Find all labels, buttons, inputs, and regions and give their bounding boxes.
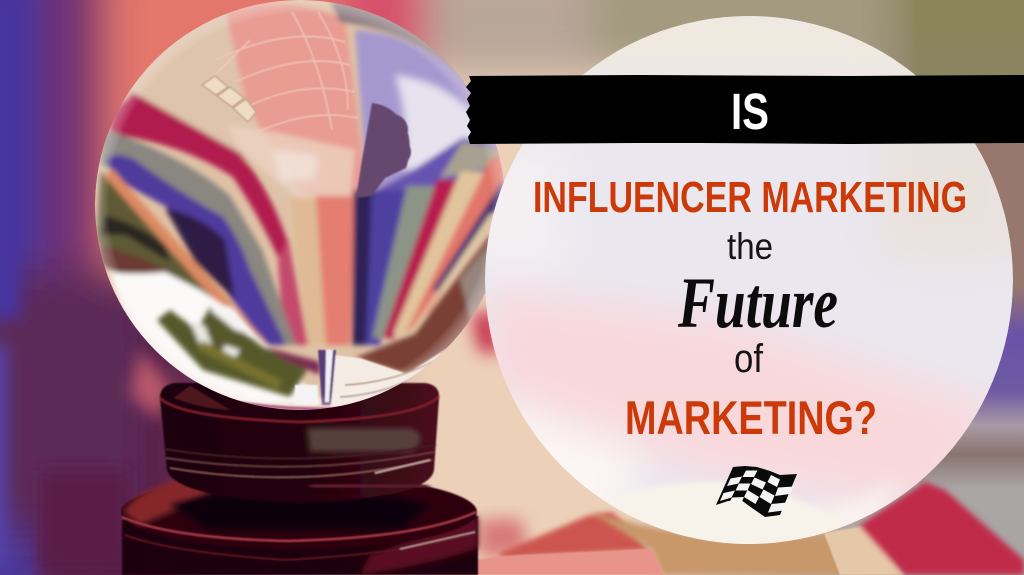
reflected tree xyxy=(356,103,411,198)
icon: checkered flag xyxy=(716,466,797,517)
banner word: IS xyxy=(731,83,769,140)
knit fabric: tan stripe xyxy=(590,512,905,575)
crimson stripe xyxy=(383,180,461,338)
knit fabric: crimson fold xyxy=(860,482,1024,575)
salmon stripe xyxy=(316,196,356,345)
reflected tree below xyxy=(157,307,320,397)
bottom right glass xyxy=(294,346,448,408)
dark plum xyxy=(165,208,235,300)
white blown-out highlight xyxy=(110,272,325,405)
crystal ball stand xyxy=(121,383,478,575)
crimson band xyxy=(108,92,288,268)
velvet ring xyxy=(235,399,338,410)
headline text: the xyxy=(727,226,773,267)
lower disc xyxy=(121,475,478,575)
purple sky below tree line xyxy=(378,136,492,194)
upper cylinder xyxy=(160,383,439,503)
knit fabric: red stripe xyxy=(500,512,650,558)
knit fabric seen through panel xyxy=(611,482,850,544)
cream stripe xyxy=(290,198,328,345)
salmon stripe right xyxy=(405,152,505,334)
brown wedge xyxy=(354,234,489,374)
cream stripe right xyxy=(393,172,491,334)
salmon diagonal xyxy=(108,172,263,347)
headline text xyxy=(533,173,967,444)
torn black banner xyxy=(466,75,1024,144)
knit fabric: pink stripe xyxy=(380,549,664,575)
glass rim xyxy=(95,0,505,410)
window panes xyxy=(202,76,256,122)
dark olive left xyxy=(95,170,212,298)
lavender sky xyxy=(355,30,510,195)
grey band xyxy=(100,130,296,345)
purple band xyxy=(106,155,286,345)
translucent circle panel xyxy=(470,0,1020,560)
grey stripe xyxy=(372,186,438,338)
purple stripe xyxy=(362,189,408,350)
refracted fabric stripes xyxy=(95,0,510,405)
headline text: Future xyxy=(677,263,838,343)
headline text: MARKETING? xyxy=(625,391,877,444)
crystal ball xyxy=(95,0,510,410)
window reflection xyxy=(205,12,358,132)
headline text: of xyxy=(734,337,764,381)
upper cream and pink xyxy=(122,13,274,202)
